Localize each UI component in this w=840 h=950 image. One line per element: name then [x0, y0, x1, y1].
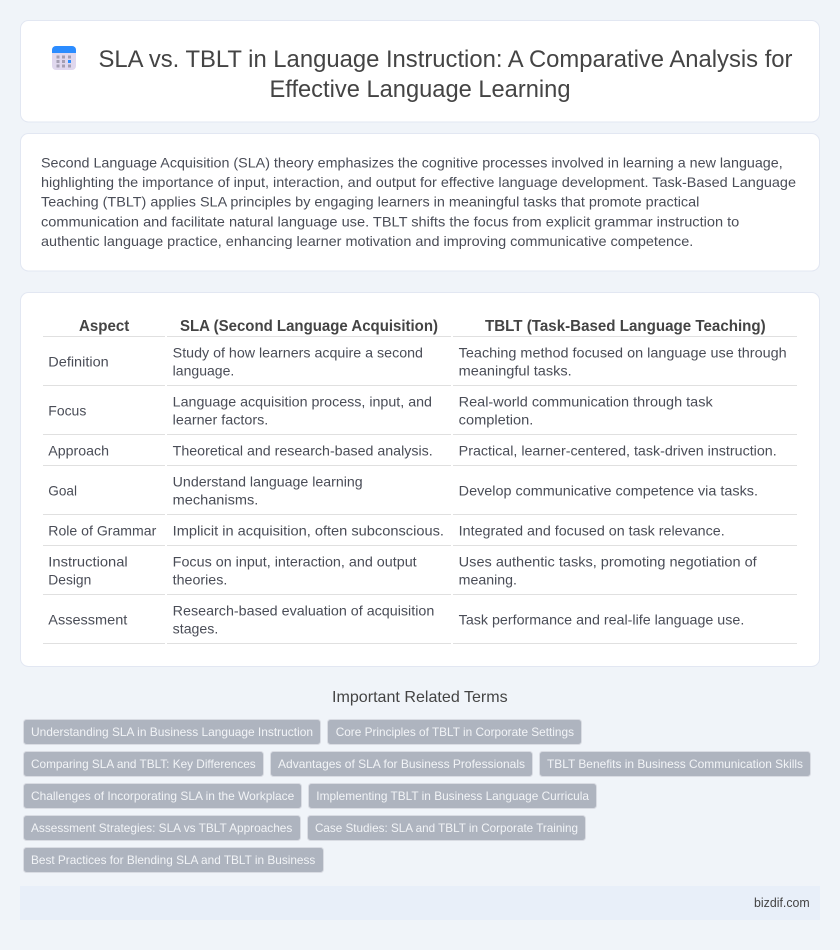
row: Definition [48, 344, 787, 379]
footer [20, 886, 820, 920]
title [98, 46, 793, 103]
text block: introduction paragraph: authentic language practice, enhancing learner motivation and improving communicative competence. [41, 233, 693, 249]
row: Goal [48, 474, 758, 508]
icon: calendar [52, 46, 76, 70]
row: Goal: Develop communicative competence via tasks. [459, 482, 758, 498]
tag [24, 848, 324, 872]
row: Definition: Teaching method focused on language use through [459, 344, 787, 360]
text block: introduction paragraph: Teaching (TBLT) applies SLA principles by engaging learners in meaningful tasks that promote practical [41, 194, 699, 210]
row: Approach: Practical, learner-centered, task-driven instruction. [459, 442, 777, 458]
row: Instructional Design: Design [48, 572, 91, 588]
row: Approach: Approach [48, 442, 109, 458]
panel: related term tags [24, 720, 810, 872]
row: Definition: Study of how learners acquire a second [173, 344, 423, 360]
row: Approach [48, 442, 777, 458]
row: Goal: mechanisms. [173, 492, 258, 508]
tag: Implementing TBLT in Business Language Curricula [316, 789, 589, 803]
row: Assessment: stages. [173, 621, 218, 637]
row: Role of Grammar: Integrated and focused on task relevance. [459, 522, 725, 538]
table header row: TBLT (Task-Based Language Teaching) [485, 318, 766, 335]
tag [24, 816, 300, 840]
row: Instructional Design: theories. [173, 572, 227, 588]
panel: comparison table [20, 292, 820, 666]
row: Goal: Goal [48, 482, 77, 498]
tag: TBLT Benefits in Business Communication Skills [547, 757, 803, 771]
panel: introduction [20, 134, 820, 271]
row: Goal: Understand language learning [173, 474, 363, 490]
row: Focus: Language acquisition process, input, and [173, 394, 432, 410]
row: Role of Grammar: Implicit in acquisition, often subconscious. [173, 522, 444, 538]
heading: important related terms: Important Related Terms [332, 689, 508, 706]
row: Role of Grammar: Role of Grammar [48, 522, 157, 538]
tag: Advantages of SLA for Business Professionals [278, 757, 525, 771]
tag [24, 784, 302, 808]
text block: introduction paragraph: communication and facilitate natural language use. TBLT shifts the focus from explicit grammar instruction to [41, 213, 740, 229]
row: Focus: Focus [48, 402, 86, 418]
tag: Comparing SLA and TBLT: Key Differences [31, 757, 256, 771]
table header row: SLA (Second Language Acquisition) [180, 318, 438, 335]
row: Instructional Design: meaning. [459, 572, 517, 588]
row: Instructional Design: Instructional [48, 554, 128, 570]
table header row [79, 318, 766, 335]
row: Assessment: Task performance and real-life language use. [459, 612, 744, 628]
row: Role of Grammar [48, 522, 725, 538]
row: Assessment [48, 602, 744, 637]
tag [308, 784, 596, 808]
row: Focus: completion. [459, 412, 533, 428]
row: Assessment: Assessment [48, 612, 127, 628]
tag: Understanding SLA in Business Language Instruction [31, 725, 313, 739]
tag [540, 752, 810, 776]
title: SLA vs. TBLT in Language Instruction: A Comparative Analysis for [98, 46, 793, 73]
tag [24, 752, 264, 776]
footer: bizdif.com [754, 895, 810, 910]
row: Instructional Design: Focus on input, interaction, and output [173, 554, 417, 570]
tag: Best Practices for Blending SLA and TBLT in Business [31, 853, 315, 867]
row: Instructional Design [48, 554, 757, 588]
tag: Assessment Strategies: SLA vs TBLT Approaches [31, 821, 292, 835]
tag [270, 752, 532, 776]
tag [24, 720, 320, 744]
row: Approach: Theoretical and research-based analysis. [173, 442, 433, 458]
text block: introduction paragraph: highlighting the importance of input, interaction, and output for effective language development. Task-Based Language [41, 174, 796, 190]
table header row: Aspect [79, 318, 130, 335]
row: Assessment: Research-based evaluation of acquisition [173, 602, 434, 618]
row: Focus [48, 394, 714, 428]
row: Definition: meaningful tasks. [459, 363, 572, 379]
tag: Case Studies: SLA and TBLT in Corporate Training [315, 821, 578, 835]
text block: introduction paragraph: Second Language Acquisition (SLA) theory emphasizes the cognitive processes involved in learning a new language, [41, 154, 783, 170]
tag [308, 816, 586, 840]
tag: Core Principles of TBLT in Corporate Settings [336, 725, 574, 739]
row: Definition: Definition [48, 354, 109, 370]
row: Instructional Design: Uses authentic tasks, promoting negotiation of [459, 554, 757, 570]
text block: introduction paragraph [41, 154, 796, 249]
tag [328, 720, 582, 744]
panel: title header [20, 20, 820, 122]
row: Focus: Real-world communication through task [459, 394, 714, 410]
row: Definition: language. [173, 363, 234, 379]
tag: Challenges of Incorporating SLA in the Workplace [31, 789, 295, 803]
row: Focus: learner factors. [173, 412, 268, 428]
title: Effective Language Learning [270, 76, 570, 103]
